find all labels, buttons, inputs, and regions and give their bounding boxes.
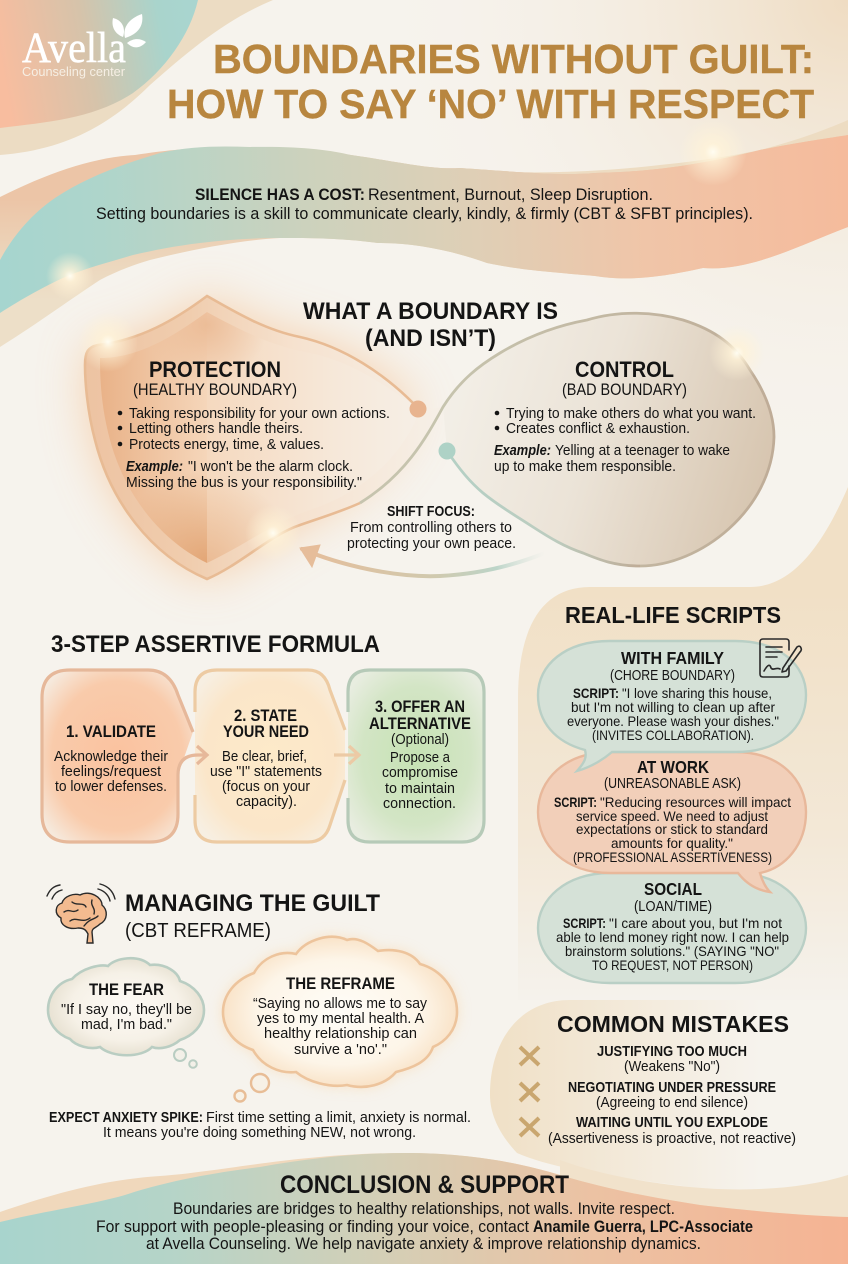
speech bubble: with family: "I love sharing this house, [622,686,772,701]
heading: what a boundary is: (AND ISN’T) [365,325,496,352]
step 2: state your need [195,670,345,842]
heading: real-life scripts: REAL-LIFE SCRIPTS [565,602,781,628]
speech bubble: at work: (PROFESSIONAL ASSERTIVENESS) [573,850,772,865]
text: protection: Letting others handle theirs. [129,421,303,437]
icon: x mark 3 [520,1118,539,1136]
thought cloud: the reframe: yes to my mental health. A [257,1011,424,1027]
speech bubble: with family: (INVITES COLLABORATION). [592,728,754,743]
text: shift focus: SHIFT FOCUS: [387,504,475,520]
heading: managing the guilt: MANAGING THE GUILT [125,890,380,917]
footer background wave [0,1153,848,1264]
mistakes list: JUSTIFYING TOO MUCH [597,1044,747,1060]
text: protection: Taking responsibility for your own actions. [129,406,390,422]
speech bubble: with family: WITH FAMILY [621,648,724,668]
dot: peach [410,400,426,418]
thought cloud: the reframe [223,937,457,1102]
thought cloud: the fear: mad, I'm bad." [81,1017,172,1033]
conclusion: Anamile Guerra, LPC-Associate [533,1217,753,1236]
speech bubble: at work: service speed. We need to adjust [576,809,768,824]
speech bubble: social: SOCIAL [644,879,702,899]
background panel: common mistakes [490,1000,848,1190]
arrow: shift focus [300,545,545,576]
icon: leaves [112,14,146,47]
icon: signed document and pen [760,639,801,677]
text: control: CONTROL [575,357,674,382]
step 3: offer an alternative [348,670,484,842]
background panel: real-life scripts [518,487,848,1000]
speech bubble: with family [538,641,806,771]
text: protection: (HEALTHY BOUNDARY) [133,381,297,399]
speech bubble: at work: "Reducing resources will impact [600,795,791,810]
step 3: offer an alternative: compromise [382,765,458,781]
speech bubble: with family: (CHORE BOUNDARY) [610,668,735,684]
step 2: state your need: YOUR NEED [223,723,309,741]
speech bubble: social: (LOAN/TIME) [634,899,712,915]
logo backdrop waves [0,0,273,155]
heading: common mistakes: COMMON MISTAKES [557,1011,789,1037]
conclusion: Boundaries are bridges to healthy relationships, not walls. Invite respect. [173,1199,675,1218]
conclusion: at Avella Counseling. We help navigate anxiety & improve relationship dynamics. [146,1234,701,1253]
connector line: protection to control [360,313,774,566]
text: control: Creates conflict & exhaustion. [506,421,690,437]
intro text [96,185,753,223]
mistakes list: WAITING UNTIL YOU EXPLODE [576,1115,768,1131]
speech bubble: social: able to lend money right now. I can help [556,930,789,945]
panel: control leaf [443,313,774,566]
thought cloud: the fear: THE FEAR [89,981,164,999]
thought cloud: the reframe: healthy relationship can [264,1026,417,1042]
step 1: validate: 1. VALIDATE [66,723,156,741]
intro text: Resentment, Burnout, Sleep Disruption. [368,185,653,204]
speech bubble: at work: amounts for quality." [611,836,733,851]
icon: x mark 1 [520,1047,539,1065]
intro text: Setting boundaries is a skill to communicate clearly, kindly, & firmly (CBT & SFBT principles). [96,204,753,223]
dot: teal [438,442,456,460]
step 2: state your need: use "I" statements [210,764,322,780]
text: control [494,357,756,475]
text: protection: Missing the bus is your responsibility." [126,475,362,491]
thought cloud: the reframe: survive a 'no'." [294,1042,387,1058]
logo [22,14,146,79]
speech bubble: with family: but I'm not willing to clean up after [571,700,775,715]
speech bubble: social: "I care about you, but I'm not [609,916,782,931]
title: BOUNDARIES WITHOUT GUILT: [213,36,814,82]
speech bubble: at work: expectations or stick to standard [576,822,768,837]
conclusion: For support with people-pleasing or finding your voice, contact [96,1217,529,1236]
step 1: validate: to lower defenses. [55,779,167,795]
text: shift focus: From controlling others to [350,520,512,536]
heading: what a boundary is: WHAT A BOUNDARY IS [303,298,558,325]
logo wordmark: Avella [22,25,126,72]
text: control: up to make them responsible. [494,459,676,475]
text: expect anxiety spike: EXPECT ANXIETY SPIKE: [49,1110,203,1126]
text: control: Example: [494,443,551,459]
logo tagline: Counseling center [22,64,126,79]
heading: managing the guilt: (CBT REFRAME) [125,919,271,942]
step 2: state your need: capacity). [236,794,297,810]
conclusion [96,1171,753,1253]
panel: protection shield [85,296,443,580]
speech bubble: social: SCRIPT: [563,916,606,931]
shield outer glow [87,296,413,579]
icon: brain [47,884,115,943]
speech bubble: social [538,873,806,983]
step 1: validate: Acknowledge their [54,749,168,765]
text: expect anxiety spike [49,1110,471,1141]
speech bubble: with family: SCRIPT: [573,686,619,701]
title [167,36,814,127]
speech bubble: at work [538,752,806,892]
arrow: step 2 to step 3 [334,746,359,764]
heading: what a boundary is [303,298,558,352]
speech bubble: at work: AT WORK [637,757,709,777]
text: protection: "I won't be the alarm clock. [188,459,353,475]
text: protection: PROTECTION [149,357,281,382]
text: control: (BAD BOUNDARY) [562,381,687,399]
sparkles [46,118,765,561]
text: protection: Example: [126,459,183,475]
mistakes list [520,1044,796,1147]
text: expect anxiety spike: It means you're doing something NEW, not wrong. [103,1125,416,1141]
step 3: offer an alternative: 3. OFFER AN [375,698,465,716]
text: control: Trying to make others do what you want. [506,406,756,422]
speech bubble: social: brainstorm solutions." (SAYING "NO" [565,944,779,959]
step 3: offer an alternative: connection. [383,796,456,812]
step 1: validate [42,670,193,842]
thought cloud: the reframe: “Saying no allows me to say [253,996,428,1012]
thought cloud: the fear: "If I say no, they'll be [61,1002,192,1018]
step 3: offer an alternative: ALTERNATIVE [369,715,471,733]
step 1: validate: feelings/request [61,764,161,780]
step 3: offer an alternative: Propose a [390,750,451,766]
speech bubble: at work: (UNREASONABLE ASK) [604,776,741,792]
text: shift focus: protecting your own peace. [347,536,516,552]
step 2: state your need: Be clear, brief, [222,749,307,765]
text: protection [118,357,390,491]
title: HOW TO SAY ‘NO’ WITH RESPECT [167,81,814,127]
speech bubble: social: TO REQUEST, NOT PERSON) [592,958,753,973]
arrow: step 1 to step 2 [178,746,207,775]
thought cloud: the fear [48,958,204,1068]
band: silence has a cost background [0,135,848,347]
diagram: protection vs control [85,296,774,580]
mistakes list: (Assertiveness is proactive, not reactive) [548,1131,796,1147]
mistakes list: (Weakens "No") [624,1059,720,1075]
mistakes list: (Agreeing to end silence) [596,1095,748,1111]
icon: x mark 2 [520,1083,539,1101]
step 3: offer an alternative: (Optional) [391,732,449,748]
text: shift focus [347,504,516,552]
heading: 3-step formula: 3-STEP ASSERTIVE FORMULA [51,631,380,658]
thought cloud: the reframe: THE REFRAME [286,975,395,993]
speech bubble: at work: SCRIPT: [554,795,597,810]
mistakes list: NEGOTIATING UNDER PRESSURE [568,1080,776,1096]
step 2: state your need: 2. STATE [234,707,297,725]
text: expect anxiety spike: First time setting a limit, anxiety is normal. [206,1110,471,1126]
text: protection: Protects energy, time, & values. [129,437,324,453]
heading: managing the guilt [125,890,380,942]
top-right beige wave [480,120,848,182]
intro text: SILENCE HAS A COST: [195,185,365,204]
step 2: state your need: (focus on your [222,779,310,795]
conclusion: CONCLUSION & SUPPORT [280,1171,569,1199]
step 3: offer an alternative: to maintain [385,781,455,797]
text: control: Yelling at a teenager to wake [555,443,730,459]
connector line: control to teal dot [447,451,640,566]
speech bubble: with family: everyone. Please wash your dishes." [567,714,779,729]
